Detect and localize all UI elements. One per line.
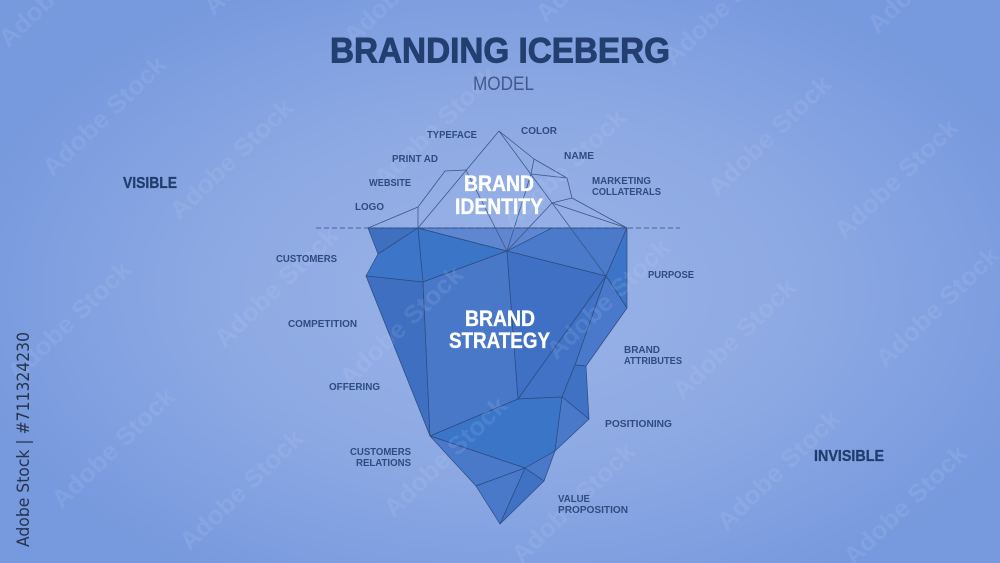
iceberg: visible outline <box>368 131 627 276</box>
labels around iceberg: PURPOSE <box>648 269 694 281</box>
title: BRANDING ICEBERG <box>330 32 670 70</box>
watermarks: Adobe Stock <box>829 114 964 245</box>
label: invisible: INVISIBLE <box>814 448 884 465</box>
labels around iceberg: PROPOSITION <box>558 504 628 516</box>
watermarks: Adobe Stock <box>667 274 802 405</box>
watermarks: Adobe Stock <box>334 261 469 392</box>
labels around iceberg: BRAND <box>624 344 660 356</box>
labels around iceberg: MARKETING <box>592 175 651 187</box>
label: visible: VISIBLE <box>123 175 177 192</box>
labels around iceberg: COMPETITION <box>288 318 357 330</box>
labels around iceberg: VALUE <box>558 493 590 505</box>
watermarks: Adobe Stock <box>541 234 676 365</box>
labels around iceberg: CUSTOMERS <box>350 446 411 458</box>
labels around iceberg: POSITIONING <box>605 418 672 430</box>
heading: brand strategy <box>449 306 550 353</box>
watermarks: Adobe Stock <box>174 425 309 556</box>
watermarks: Adobe Stock <box>368 62 503 193</box>
labels around iceberg <box>276 125 694 516</box>
labels around iceberg: NAME <box>564 150 594 162</box>
subtitle: MODEL <box>473 74 534 95</box>
labels around iceberg: ATTRIBUTES <box>624 355 682 367</box>
watermarks: Adobe Stock <box>46 383 181 514</box>
labels around iceberg: OFFERING <box>329 381 380 393</box>
heading: brand identity: BRAND <box>464 171 534 196</box>
watermarks: Adobe Stock <box>378 392 513 523</box>
watermarks: Adobe Stock <box>209 222 344 353</box>
labels around iceberg: COLLATERALS <box>592 186 661 198</box>
labels around iceberg: CUSTOMERS <box>276 253 337 265</box>
heading: brand strategy: BRAND <box>465 306 535 331</box>
heading: brand identity <box>455 171 543 219</box>
stock credit: Adobe Stock | #711324230 <box>14 332 34 547</box>
heading: brand identity: IDENTITY <box>455 194 543 219</box>
labels around iceberg: PRINT AD <box>392 153 438 165</box>
labels around iceberg: WEBSITE <box>369 177 411 189</box>
watermarks: Adobe Stock <box>702 71 837 202</box>
watermarks: Adobe Stock <box>711 405 846 536</box>
watermarks: Adobe Stock <box>870 242 1000 373</box>
labels around iceberg: RELATIONS <box>356 457 411 469</box>
watermarks: Adobe Stock <box>164 94 299 225</box>
iceberg: submerged part <box>366 228 627 524</box>
waterline <box>316 227 680 229</box>
labels around iceberg: TYPEFACE <box>427 129 477 141</box>
labels around iceberg: LOGO <box>355 201 384 213</box>
labels around iceberg: COLOR <box>521 125 557 137</box>
watermarks: Adobe Stock <box>497 104 632 235</box>
heading: brand strategy: STRATEGY <box>449 328 550 353</box>
watermarks: Adobe Stock <box>2 256 137 387</box>
watermarks: Adobe Stock <box>37 51 172 182</box>
